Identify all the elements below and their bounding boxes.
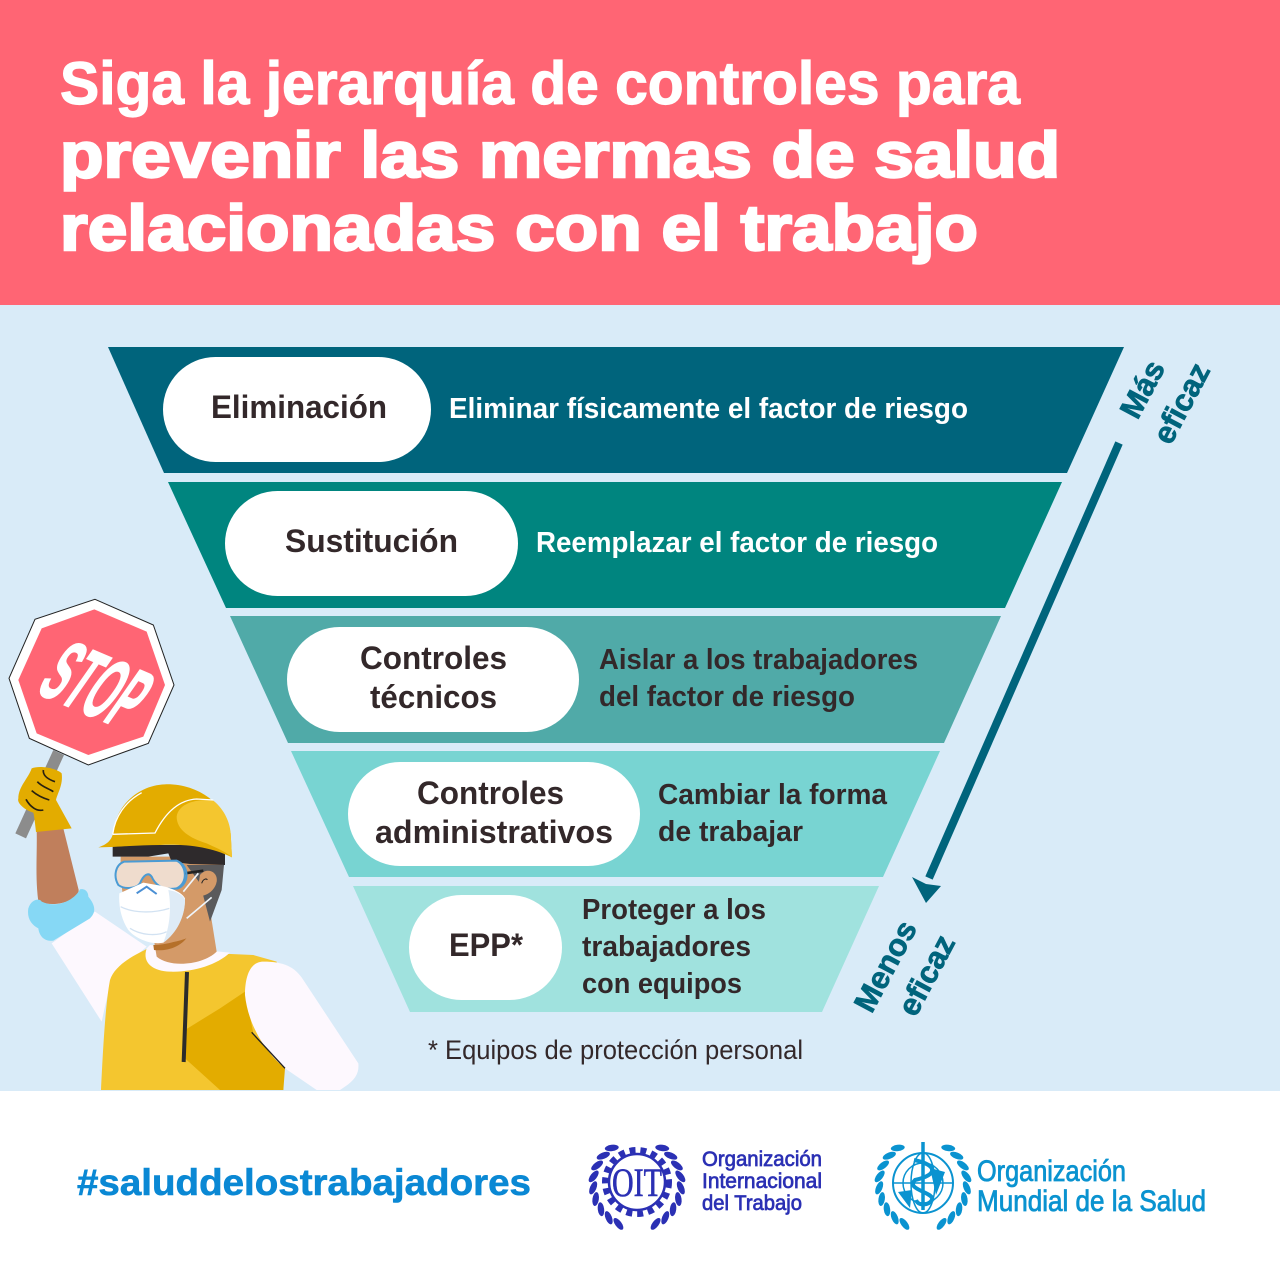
hashtag: #saluddelostrabajadores [77,1162,531,1203]
stop sign: STOP [23,625,170,746]
white sleeve left [52,912,147,1022]
helmet [98,784,232,857]
panel: light blue background [0,305,1280,1091]
right sleeve [245,962,358,1090]
panel: EPP band: Proteger a los [582,894,766,926]
hair fringe [113,845,225,865]
logo text: Organización Mundial de la Salud [977,1155,1206,1218]
torso [101,946,283,1090]
panel: Eliminación band [108,347,1124,473]
goggles [116,861,185,889]
illustration: worker holding stop sign [9,599,358,1090]
logo text: Organización Internacional del Trabajo: del Trabajo [702,1192,802,1215]
panel: Controles técnicos band: Aislar a los trabajadores [599,644,918,676]
label: Más eficaz: Más [1113,354,1172,424]
collar [145,945,230,972]
panel: Controles técnicos band: del factor de riesgo [599,681,855,713]
panel: Controles administrativos band: Controles [417,775,564,811]
panel: Eliminación band: Eliminar físicamente el factor de riesgo [449,393,968,425]
panel: Controles administrativos band [291,751,940,877]
sign pole [15,750,64,838]
footnote: * Equipos de protección personal [428,1035,803,1065]
panel: EPP band [353,886,879,1012]
title: prevenir las mermas de salud [60,119,1060,191]
panel: Sustitución band: Sustitución [285,523,458,559]
panel: EPP band: con equipos [582,968,742,1000]
panel: Controles administrativos band: administrativos [375,814,613,850]
panel: Sustitución band [168,482,1062,608]
header banner [0,0,1280,305]
torso shadow [185,992,285,1090]
panel: Controles técnicos band: técnicos [370,679,497,715]
laurel wreath [586,1139,688,1233]
forearm [36,828,79,904]
logo text: Organización Mundial de la Salud: Organización [977,1155,1126,1188]
stop sign [9,599,174,765]
yellow glove [18,767,72,832]
logo: WHO emblem [872,1139,974,1233]
face [121,857,223,943]
laurel wreath [872,1139,974,1233]
panel: Controles administrativos band: de trabajar [658,816,803,848]
goggle strap [185,871,203,873]
title [60,50,1060,264]
logo: OIT emblem: OIT [612,1160,662,1205]
panel: EPP band: EPP* [449,927,524,963]
logo text: Organización Internacional del Trabajo: Internacional [702,1170,822,1193]
arrow: more to less effective [912,443,1119,903]
logo text: Organización Internacional del Trabajo: Organización [702,1148,822,1171]
logo text: Organización Internacional del Trabajo [702,1148,822,1215]
label: Menos eficaz: Menos [847,915,924,1018]
label: Menos eficaz: eficaz [891,929,962,1021]
panel: Sustitución band: Reemplazar el factor de riesgo [536,527,938,559]
logo text: Organización Mundial de la Salud: Mundial de la Salud [977,1185,1206,1218]
title: Siga la jerarquía de controles para [60,50,1021,117]
zipper [184,972,187,1062]
glove cuff [28,889,94,941]
label: Más eficaz [1113,354,1217,449]
panel: Controles técnicos band: Controles [360,640,507,676]
panel: EPP band: trabajadores [582,931,751,963]
neck [153,910,217,964]
side hair [187,865,224,922]
panel: Controles técnicos band [230,616,1001,743]
title: relacionadas con el trabajo [60,192,978,264]
ear [197,871,217,896]
panel: Controles administrativos band: Cambiar la forma [658,779,888,811]
label: Menos eficaz [847,915,962,1021]
label: Más eficaz: eficaz [1146,357,1217,449]
panel: Eliminación band: Eliminación [211,389,387,425]
respirator mask [119,883,185,943]
logo: OIT emblem [586,1139,688,1233]
